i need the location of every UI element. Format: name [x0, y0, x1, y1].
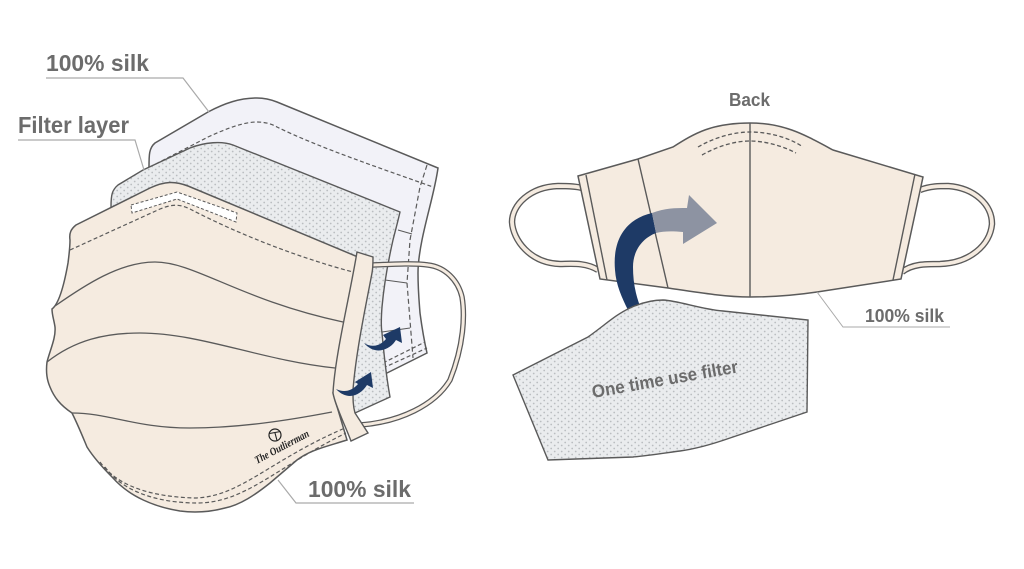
label: filter: One time use filter [590, 357, 739, 402]
nose pocket [131, 192, 237, 222]
front silk layer [46, 182, 358, 512]
label: Back: Back [729, 90, 771, 110]
label: 100% silk right [817, 292, 950, 327]
label: 100% silk right: 100% silk [865, 306, 945, 326]
back silk layer [149, 98, 438, 374]
panel: front mask exploded layers [46, 98, 463, 512]
nose stitching [698, 132, 803, 155]
panel: back of mask [512, 123, 992, 297]
label: 100% silk top: 100% silk [46, 50, 149, 76]
stitching [70, 205, 353, 503]
ear loops [512, 186, 992, 272]
side band [333, 252, 373, 441]
label: 100% silk bottom: 100% silk [308, 476, 411, 502]
brand logo: The Outlierman [253, 428, 311, 467]
ear loop [360, 264, 463, 425]
label: Filter layer: Filter layer [18, 112, 129, 138]
label: 100% silk top [46, 50, 209, 112]
arrow: filter insertion [615, 195, 717, 310]
filter layer [111, 143, 400, 413]
label: Filter layer [18, 112, 144, 170]
pleat lines [47, 262, 343, 428]
arrow: into back layer [364, 327, 402, 350]
arrow: into filter layer [336, 372, 373, 396]
seams [586, 123, 915, 297]
mask body [578, 123, 923, 297]
panel: one time use filter [513, 300, 808, 460]
